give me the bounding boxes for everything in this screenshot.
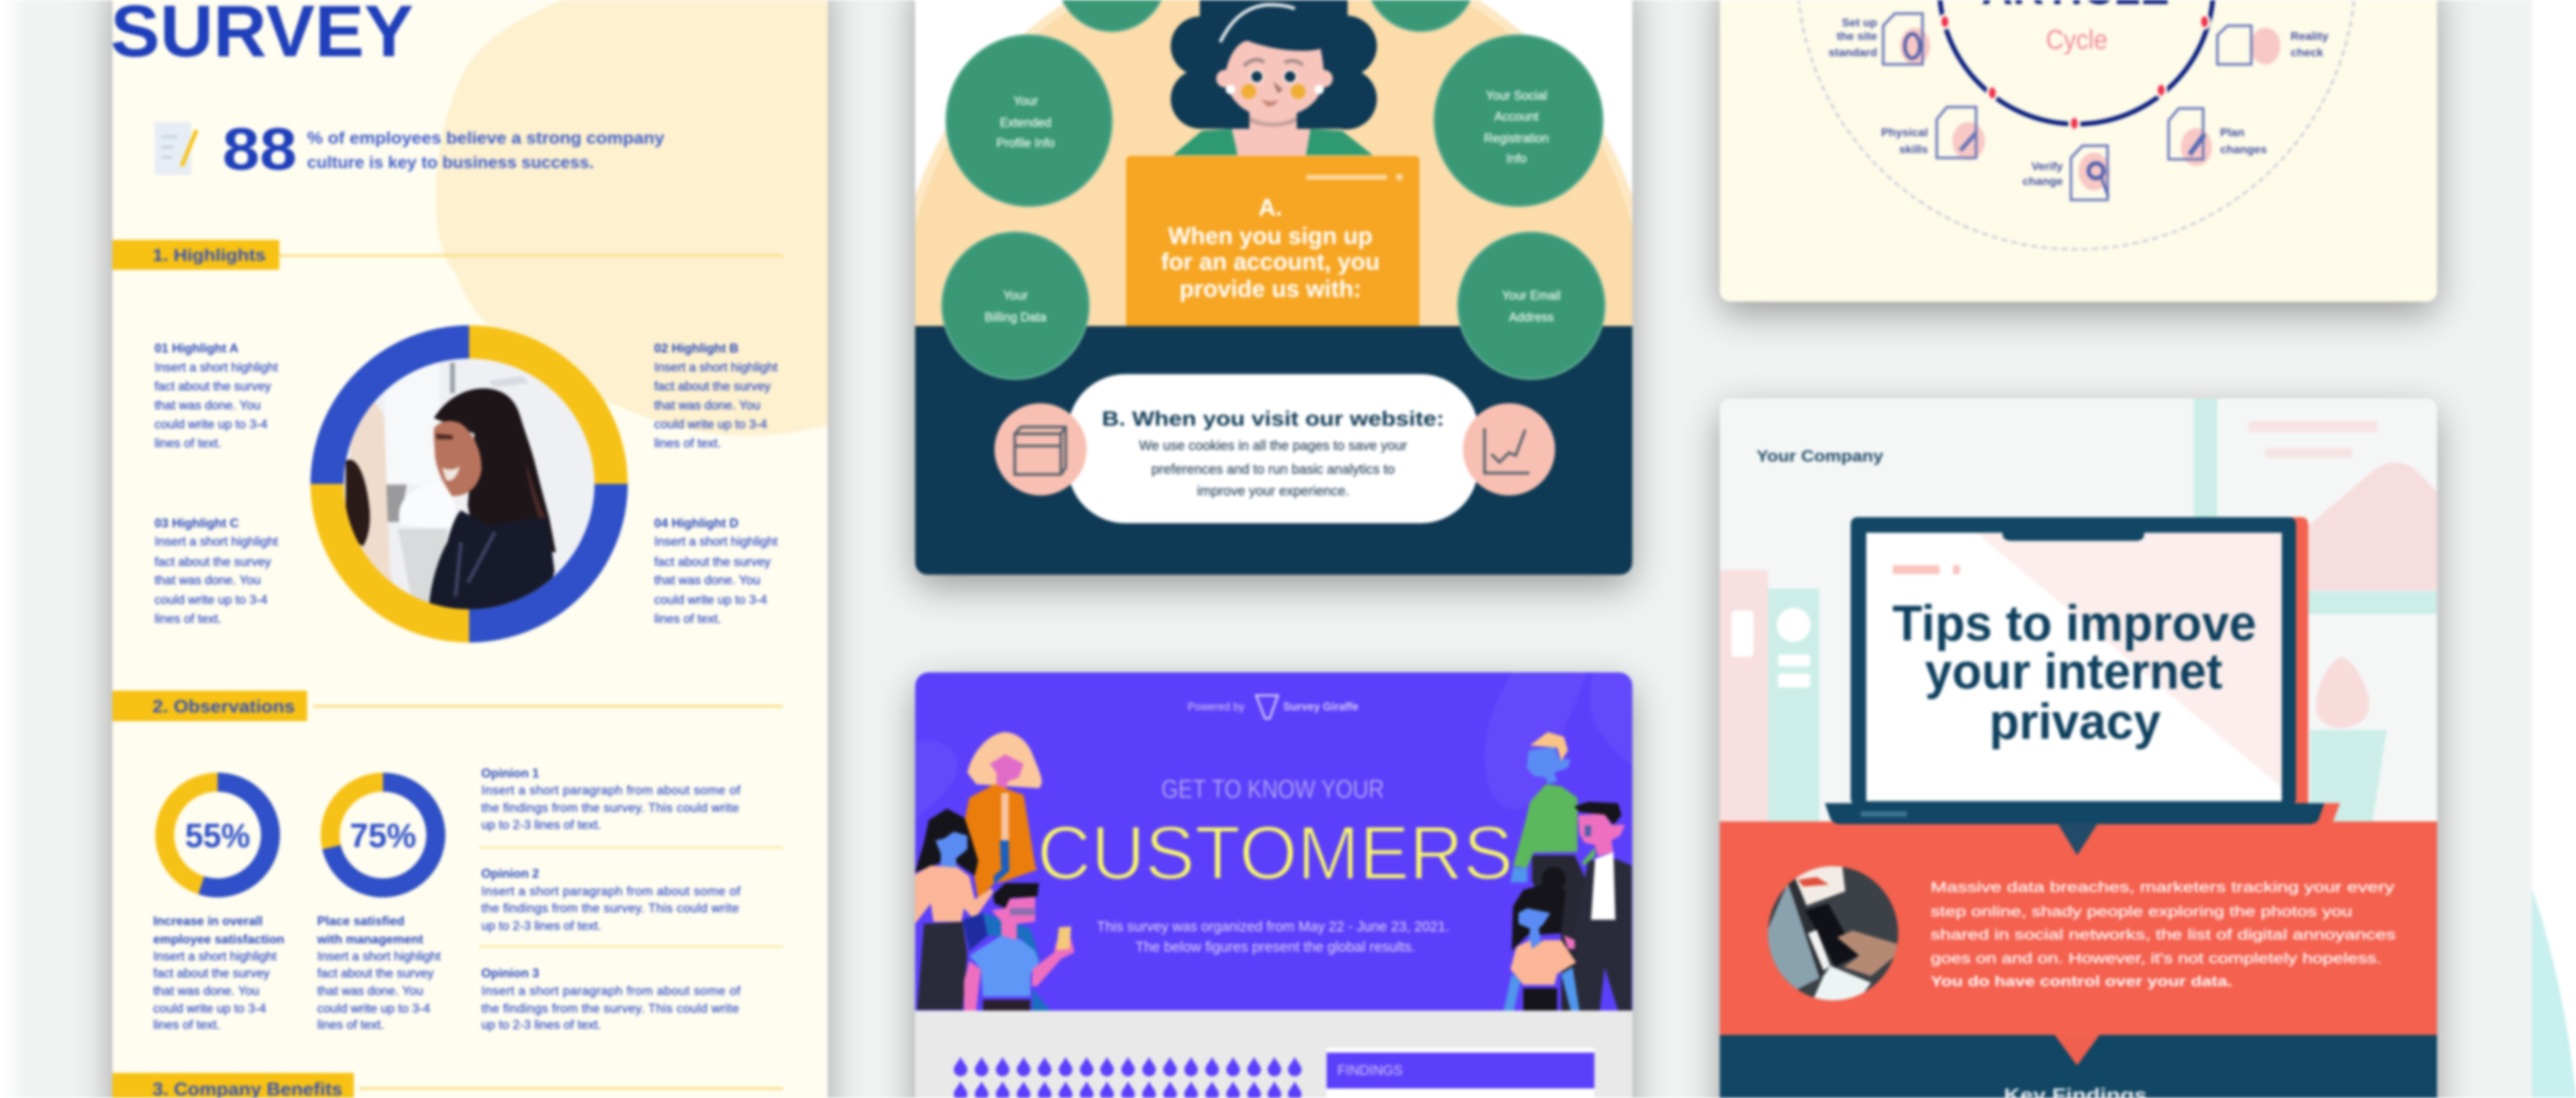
highlight C: that was done. You xyxy=(155,573,260,587)
coral section text: Massive data breaches, marketers tracking your every xyxy=(1931,879,2394,895)
opinion 2: Opinion 2 xyxy=(481,866,539,880)
opinion 1: up to 2-3 lines of text. xyxy=(481,817,601,832)
laptop screen title: Tips to improve xyxy=(1893,595,2256,651)
highlight C: lines of text. xyxy=(155,611,222,626)
coral section text: goes on and on. However, it's not completely hopeless. xyxy=(1931,950,2381,967)
highlight D: 04 Highlight D xyxy=(654,516,738,530)
step: verify change: change xyxy=(2022,175,2063,188)
step: reality check xyxy=(2217,26,2329,64)
highlight B: that was done. You xyxy=(654,398,760,412)
opinion 2: Insert a short paragraph from about some of xyxy=(481,884,741,898)
opinion 1: the findings from the survey. This could write xyxy=(481,800,739,815)
callout: website visit xyxy=(1068,374,1478,523)
coral section text: You do have control over your data. xyxy=(1931,973,2232,990)
inner navy ring xyxy=(1939,0,2213,124)
observation text column 1: lines of text. xyxy=(153,1017,220,1032)
observation text column 1: could write up to 3-4 xyxy=(153,1001,266,1015)
donut with photo xyxy=(310,325,628,643)
illustration: right group of people xyxy=(1504,732,1632,1011)
subtitle: GET TO KNOW YOUR xyxy=(1161,775,1384,804)
powered by logo: Survey Giraffe xyxy=(1283,700,1359,713)
opinion 3 xyxy=(481,966,741,1032)
laptop screen title: privacy xyxy=(1989,693,2161,750)
observation text column 2: Place satisfied xyxy=(317,914,405,928)
powered by logo xyxy=(1188,695,1359,718)
circle label: billing: Your xyxy=(1003,289,1028,302)
highlight D xyxy=(654,516,778,626)
highlight B: lines of text. xyxy=(654,436,721,450)
observation text column 2: Insert a short highlight xyxy=(317,949,441,963)
step: set up: the site xyxy=(1836,30,1877,43)
circle label: social account: Account xyxy=(1494,110,1539,123)
callout body: improve your experience. xyxy=(1197,484,1349,499)
icon: survey paper and pencil xyxy=(155,122,197,175)
opinion 1: Insert a short paragraph from about some of xyxy=(481,783,741,797)
highlight C: Insert a short highlight xyxy=(155,534,278,548)
circle label: social account: Info xyxy=(1506,152,1527,165)
step: reality check: check xyxy=(2291,46,2324,59)
highlight D: Insert a short highlight xyxy=(654,534,778,548)
laptop text: When you sign up xyxy=(1168,223,1373,249)
findings box: FINDINGS xyxy=(1337,1063,1403,1078)
circle label: extended profile: Extended xyxy=(1000,116,1051,129)
step: physical skills: skills xyxy=(1899,143,1928,156)
survey description: The below figures present the global results. xyxy=(1135,939,1415,955)
circle label: email: Your Email xyxy=(1502,289,1561,302)
room illustration background xyxy=(1720,399,2437,821)
laptop text: for an account, you xyxy=(1161,249,1380,275)
step: physical skills xyxy=(1881,107,1985,160)
circle label: social account: Your Social xyxy=(1486,89,1547,102)
callout body: We use cookies in all the pages to save your xyxy=(1139,439,1407,453)
opinion 3: up to 2-3 lines of text. xyxy=(481,1017,601,1032)
circle label: email: Address xyxy=(1509,310,1554,324)
highlight D: fact about the survey xyxy=(654,554,771,569)
decorative swirl xyxy=(915,672,1632,820)
title: customers: CUSTOMERS xyxy=(1037,811,1513,895)
opinion 2: the findings from the survey. This could write xyxy=(481,901,739,915)
statistic 88: 88 xyxy=(222,115,297,182)
laptop text: A. xyxy=(1258,195,1283,221)
highlight B: could write up to 3-4 xyxy=(654,417,767,431)
opinion 3: the findings from the survey. This could write xyxy=(481,1001,739,1015)
panel: cycle diagram xyxy=(1720,0,2437,302)
opinion 3: Insert a short paragraph from about some of xyxy=(481,983,741,998)
company name: Your Company xyxy=(1756,447,1884,466)
highlight C: 03 Highlight C xyxy=(155,516,239,530)
observation text column 2: could write up to 3-4 xyxy=(317,1001,430,1015)
coral section text xyxy=(1931,879,2396,990)
ring markers xyxy=(1940,15,2209,130)
panel: employee survey xyxy=(110,0,828,1098)
photo: smiling woman xyxy=(339,356,600,613)
cycle title: Cycle xyxy=(2046,25,2108,55)
highlight A: Insert a short highlight xyxy=(155,360,278,374)
observation text column 1: employee satisfaction xyxy=(153,932,284,946)
highlight D: that was done. You xyxy=(654,573,760,587)
heading: company benefits xyxy=(113,1073,783,1098)
step: set up: Set up xyxy=(1842,16,1877,29)
step: plan changes xyxy=(2169,108,2267,166)
powered by logo: Powered by xyxy=(1188,700,1245,713)
observation text column 1: Increase in overall xyxy=(153,914,262,928)
highlight A: could write up to 3-4 xyxy=(155,417,268,431)
chart: donut 55% xyxy=(165,782,270,888)
chart: donut 75%: 75% xyxy=(350,817,416,855)
highlight C: fact about the survey xyxy=(155,554,271,569)
panel: get to know your customers xyxy=(915,672,1632,1098)
opinion 3: Opinion 3 xyxy=(481,966,539,980)
opinion 2 xyxy=(481,866,741,933)
coral section text: shared in social networks, the list of digital annoyances xyxy=(1931,927,2396,943)
opinion 1 xyxy=(481,766,741,832)
circle label: social account: Registration xyxy=(1484,131,1549,145)
step: plan changes: Plan xyxy=(2220,126,2245,139)
highlight A: lines of text. xyxy=(155,436,222,450)
coral section text: step online, shady people exploring the photos you xyxy=(1931,903,2352,920)
step: verify change xyxy=(2022,146,2110,200)
highlight B: Insert a short highlight xyxy=(654,360,778,374)
opinion 2: up to 2-3 lines of text. xyxy=(481,918,601,933)
dashed outer ring xyxy=(1797,0,2356,249)
icon: box xyxy=(994,403,1087,495)
chart: donut 55%: 55% xyxy=(185,817,250,855)
findings box xyxy=(1327,1048,1594,1098)
laptop screen title: your internet xyxy=(1925,643,2222,699)
heading: highlights xyxy=(113,240,783,270)
circle label: billing: Billing Data xyxy=(984,310,1047,324)
heading: observations: 2. Observations xyxy=(153,696,295,716)
highlight C: could write up to 3-4 xyxy=(155,592,268,607)
heading: highlights: 1. Highlights xyxy=(153,246,266,265)
photo: hand holding phone xyxy=(1763,861,1905,1006)
circle label: extended profile: Your xyxy=(1013,94,1038,108)
icon: growth chart xyxy=(1463,403,1555,495)
observation text column 1: Insert a short highlight xyxy=(153,949,277,963)
observation text column 1 xyxy=(153,914,284,1032)
callout body: preferences and to run basic analytics to xyxy=(1151,462,1395,477)
observation text column 1: that was done. You xyxy=(153,983,259,998)
illustration: left group of people xyxy=(915,732,1074,1011)
step: set up xyxy=(1828,14,1930,64)
survey description: This survey was organized from May 22 - June 23, 2021. xyxy=(1097,919,1449,935)
highlight D: lines of text. xyxy=(654,611,721,626)
opinion 1: Opinion 1 xyxy=(481,766,539,780)
laptop text: provide us with: xyxy=(1180,276,1361,302)
step: reality check: Reality xyxy=(2291,30,2329,43)
observation text column 2 xyxy=(317,914,441,1032)
pointer arrow: coral xyxy=(2055,1035,2099,1065)
observation text column 2: fact about the survey xyxy=(317,966,434,980)
illustration: woman with laptop xyxy=(1171,0,1377,157)
navy section xyxy=(1720,1035,2437,1098)
laptop screen title xyxy=(1893,595,2256,750)
observation text column 1: fact about the survey xyxy=(153,966,270,980)
statistic description xyxy=(307,129,664,172)
chart: donut 75% xyxy=(330,782,436,888)
observation text column 2: with management xyxy=(317,932,423,946)
pictogram chart xyxy=(954,1057,1302,1098)
step: plan changes: changes xyxy=(2220,143,2267,156)
statistic description: culture is key to business success. xyxy=(307,153,594,172)
circle label: extended profile: Profile Info xyxy=(997,136,1055,150)
pointer arrow: navy xyxy=(2057,823,2098,855)
highlight A: 01 Highlight A xyxy=(155,341,239,355)
observation text column 2: that was done. You xyxy=(317,983,423,998)
navy base xyxy=(915,326,1632,577)
highlight B: 02 Highlight B xyxy=(654,341,738,355)
background blob xyxy=(436,0,828,436)
highlight C xyxy=(155,516,278,626)
step: verify change: Verify xyxy=(2032,160,2064,173)
cycle title xyxy=(1981,0,2169,55)
step: physical skills: Physical xyxy=(1881,126,1928,139)
highlight A: fact about the survey xyxy=(155,379,271,393)
green info circles xyxy=(942,0,1605,379)
arch background xyxy=(914,0,1634,328)
orange laptop xyxy=(1126,156,1420,326)
highlight A: that was done. You xyxy=(155,398,260,412)
highlight B: fact about the survey xyxy=(654,379,771,393)
highlight B xyxy=(654,341,778,450)
step: set up: standard xyxy=(1828,46,1877,59)
coral section xyxy=(1720,821,2437,1035)
observation text column 2: lines of text. xyxy=(317,1017,384,1032)
highlight D: could write up to 3-4 xyxy=(654,592,767,607)
callout heading: B. When you visit our website: xyxy=(1102,407,1444,430)
survey description xyxy=(1097,919,1449,955)
laptop illustration xyxy=(1825,517,2340,824)
highlight A xyxy=(155,341,278,450)
panel: internet privacy tips xyxy=(1720,399,2437,1098)
statistic description: % of employees believe a strong company xyxy=(307,129,664,148)
heading: observations xyxy=(113,691,783,721)
panel: data privacy xyxy=(891,0,1657,611)
